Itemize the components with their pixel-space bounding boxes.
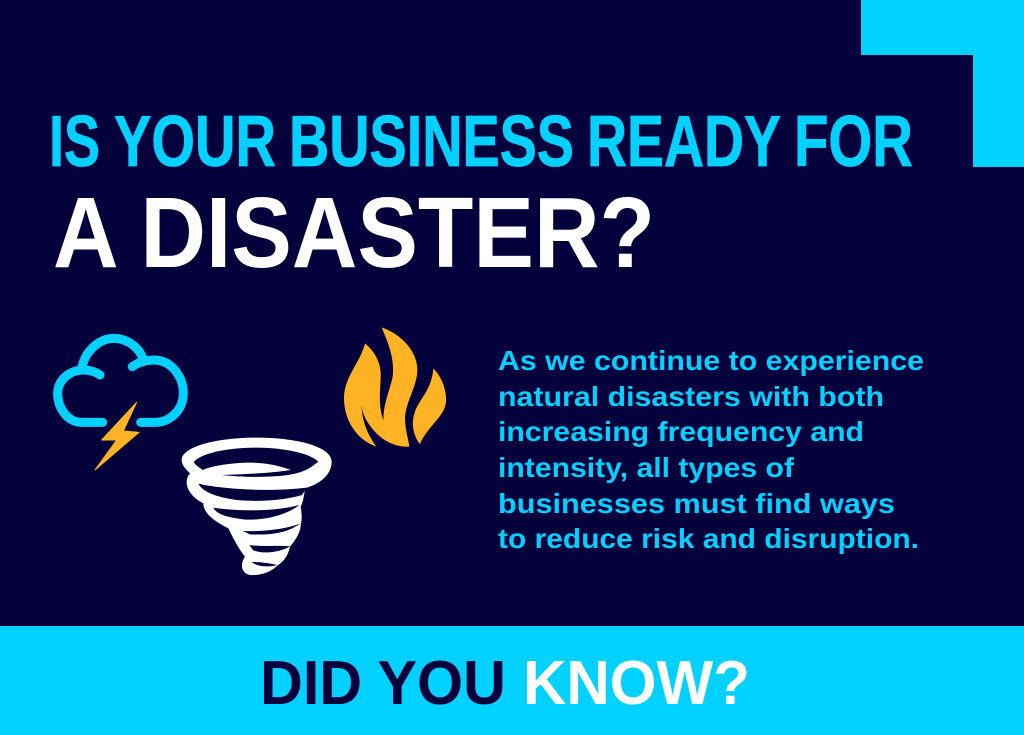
line 2: natural disasters with both — [498, 381, 884, 412]
banner heading: KNOW? — [523, 649, 750, 718]
flame middle tongue — [362, 327, 417, 447]
tornado inner gaps — [194, 448, 318, 566]
intro paragraph — [498, 345, 924, 554]
title line: is your business ready for: READY — [587, 102, 781, 182]
icon: flame — [344, 327, 446, 447]
bottom banner — [0, 626, 1024, 735]
title line: is your business ready for — [49, 102, 913, 182]
icon: storm cloud with lightning — [58, 338, 183, 470]
flame right tongue — [413, 368, 446, 444]
line 6: to reduce risk and disruption. — [498, 523, 919, 554]
banner heading: DID YOU — [260, 649, 506, 718]
corner bracket decoration — [861, 0, 1024, 167]
line 4: intensity, all types of — [498, 452, 795, 483]
cloud outline — [58, 338, 183, 422]
title — [49, 102, 913, 289]
title line: a disaster: A DISASTER? — [53, 177, 655, 289]
line 3: increasing frequency and — [498, 416, 864, 447]
title line: is your business ready for: IS — [49, 102, 100, 182]
title line: is your business ready for: YOUR — [114, 102, 276, 182]
icon: tornado — [182, 438, 332, 575]
title line: is your business ready for: FOR — [794, 102, 913, 182]
title line: is your business ready for: BUSINESS — [289, 102, 574, 182]
flame left tongue — [344, 343, 383, 447]
tornado silhouette — [182, 438, 332, 575]
banner heading — [260, 649, 750, 718]
lightning bolt — [95, 402, 139, 470]
line 1: As we continue to experience — [498, 345, 924, 376]
line 5: businesses must find ways — [498, 488, 895, 519]
